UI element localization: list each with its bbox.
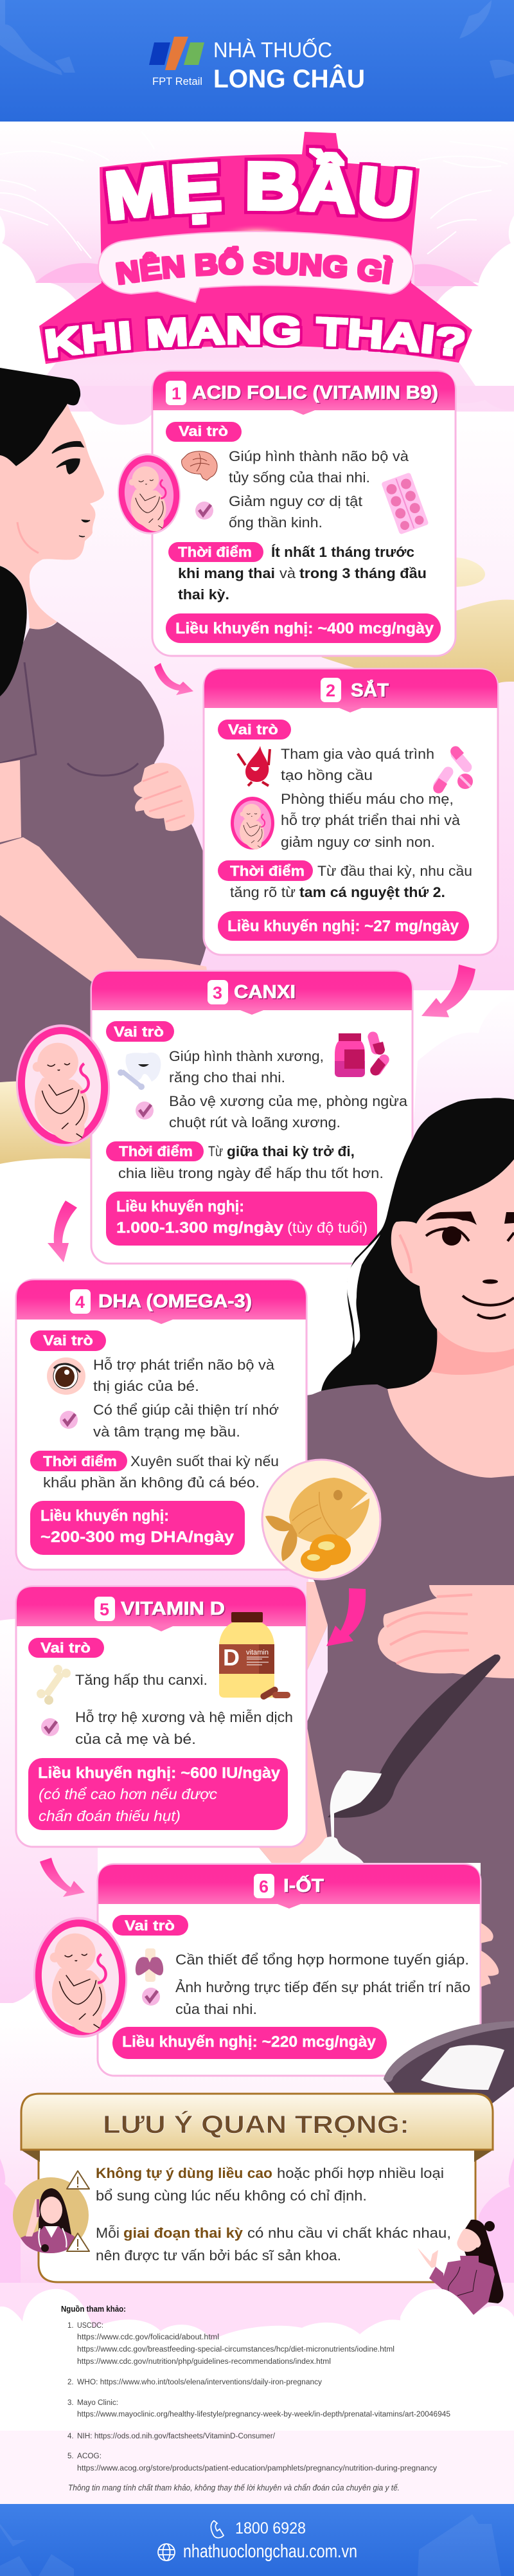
icon: blister pack: [381, 472, 429, 535]
icon: phone: [211, 2521, 224, 2538]
chest: [387, 1325, 514, 1478]
hand: [378, 1585, 514, 1678]
dose box: Liều khuyến nghị: ~600 IU/ngày: [38, 1764, 281, 1782]
number badge: 2: [326, 681, 335, 700]
card header: [17, 1587, 306, 1626]
header band: [0, 0, 514, 122]
card header: [153, 372, 455, 410]
face: [457, 2229, 481, 2252]
dose pill: Liều khuyến nghị: ~220 mcg/ngày: [122, 2033, 377, 2051]
icon: check: [41, 1718, 59, 1736]
role text 2: của thai nhi.: [175, 2001, 257, 2017]
hand: [134, 763, 194, 831]
face details: [52, 442, 90, 537]
face: [391, 1159, 514, 1352]
role text 1: tủy sống của thai nhi.: [229, 469, 370, 485]
note text: nên được tư vấn bởi bác sĩ sản khoa.: [96, 2247, 341, 2263]
card header: [204, 669, 497, 708]
arrow 4: [326, 1588, 366, 1646]
role pill: [30, 1330, 106, 1351]
website: nhathuoclongchau.com.vn: [183, 2541, 357, 2562]
number badge: [166, 381, 186, 405]
arm skin: [259, 1582, 350, 1863]
timing pill: [30, 1451, 127, 1471]
dose pill: Liều khuyến nghị: ~400 mcg/ngày: [175, 620, 434, 637]
icon: vitamin D bottle: D: [223, 1644, 240, 1671]
yogurt mound: [300, 1837, 364, 1863]
number badge: 1: [172, 384, 181, 403]
hair: [0, 368, 80, 696]
hair highlight: [347, 1235, 380, 1348]
reference list: WHO: https://www.who.int/tools/elena/interventions/daily-iron-pregnancy: [77, 2379, 322, 2386]
timing text: khẩu phần ăn không đủ cá béo.: [43, 1474, 260, 1491]
number badge: [94, 1597, 115, 1621]
dose box: chẩn đoán thiếu hụt): [39, 1808, 181, 1824]
card frame: [98, 1864, 481, 2076]
role text 2: chuột rút và loãng xương.: [169, 1114, 341, 1130]
illustration: woman right: [259, 1098, 514, 2032]
role pill: [106, 1021, 174, 1042]
dose pill: [112, 2027, 387, 2059]
role pill: Vai trò: [40, 1640, 91, 1656]
title: [39, 132, 472, 364]
role text 1: tạo hồng cầu: [281, 767, 373, 783]
role text 1: Hỗ trợ phát triển não bộ và: [93, 1357, 275, 1373]
face details: [400, 1211, 514, 1318]
icon: thyroid: [136, 1948, 163, 1982]
icon: check: [195, 502, 213, 520]
title backing shape: [39, 132, 472, 364]
references: [61, 2304, 450, 2492]
dose pill: [218, 911, 469, 941]
role text 2: Giảm nguy cơ dị tật: [229, 493, 362, 509]
role text 1: [169, 1048, 324, 1085]
arrow 1: [154, 663, 193, 695]
timing pill: [168, 542, 263, 562]
role text 2: Ảnh hưởng trực tiếp đến sự phát triển trí não: [175, 1979, 470, 1995]
speech bubble: [98, 231, 413, 302]
reference list: https://www.cdc.gov/folicacid/about.html: [77, 2334, 219, 2341]
card header: [98, 1865, 480, 1904]
icon: globe: [158, 2544, 175, 2561]
icon: vitamin D bottle: vitamin: [246, 1649, 269, 1656]
title line 3: KHI MANG THAI?: [42, 313, 468, 361]
timing text: [178, 544, 427, 603]
icon: tooth and bone: [118, 1053, 161, 1090]
dose box: (có thể cao hơn nếu được: [39, 1786, 218, 1802]
timing text: Ít nhất 1 tháng trước: [271, 544, 414, 560]
timing pill: Thời điểm: [43, 1453, 117, 1469]
card frame: [204, 669, 498, 955]
role text 2: của cả mẹ và bé.: [75, 1731, 196, 1747]
card frame: [16, 1280, 306, 1570]
panel: card 3: [91, 971, 412, 1264]
card header: [92, 972, 412, 1010]
icon: supplement bottle: [335, 1031, 391, 1077]
illustration: woman presenting: [418, 2220, 503, 2315]
panel: important note: [13, 2094, 503, 2315]
panel: card 4: [16, 1280, 306, 1570]
note text: Mỗi: [96, 2225, 120, 2241]
panel: card 2: [204, 669, 498, 955]
dose pill: Liều khuyến nghị: ~27 mg/ngày: [227, 918, 459, 935]
reference list: 2.: [67, 2379, 74, 2386]
timing text: Từ: [208, 1143, 223, 1159]
reference list: https://www.mayoclinic.org/healthy-lifestyle/pregnancy-week-by-week/in-depth/prenatal-vitamins/art-20046945: [77, 2411, 450, 2418]
sweater: [442, 2256, 495, 2315]
reference list: Mayo Clinic:: [77, 2399, 118, 2407]
timing text: và: [279, 565, 296, 581]
role pill: Vai trò: [228, 721, 278, 738]
role pill: [218, 720, 291, 739]
icon: doctor: [13, 2177, 89, 2253]
dose box: [106, 1192, 377, 1246]
card frame: [16, 1586, 306, 1847]
dose box: [30, 1501, 245, 1555]
reference list: NIH: https://ods.od.nih.gov/factsheets/VitaminD-Consumer/: [77, 2433, 276, 2440]
number badge: 6: [259, 1877, 269, 1896]
timing pill: [218, 860, 313, 881]
timing text: thai kỳ.: [178, 586, 229, 603]
role pill: [112, 1915, 188, 1936]
fingertips: [481, 1923, 499, 1987]
note text: hoặc phối hợp nhiều loại: [277, 2165, 444, 2181]
footer band: [0, 2504, 514, 2576]
panel: card 5: [16, 1586, 306, 1847]
timing text: Từ đầu thai kỳ, nhu cầu: [317, 863, 472, 879]
icon: check: [136, 1102, 154, 1120]
brand name line 2: LONG CHÂU: [213, 64, 365, 93]
note text: [96, 2165, 451, 2263]
reference list: 4.: [67, 2433, 74, 2440]
shirt folds: [0, 662, 36, 763]
reference list: 3.: [67, 2399, 74, 2407]
role text 2: [93, 1402, 279, 1440]
role pill: Vai trò: [43, 1332, 93, 1348]
heading: CANXI: [234, 982, 296, 1002]
reference list: [67, 2322, 450, 2472]
role text 2: và tâm trạng mẹ bầu.: [93, 1424, 240, 1440]
neck shade: [430, 1329, 514, 1375]
title line 1: MẸ BẦU: [103, 145, 416, 228]
heading: SẮT: [351, 679, 389, 701]
role text 1: Tăng hấp thu canxi.: [75, 1672, 208, 1688]
reference list: https://www.cdc.gov/nutrition/php/guidelines-recommendations/index.html: [77, 2358, 331, 2366]
note text: Không tự ý dùng liều cao: [96, 2165, 272, 2181]
heading: VITAMIN D: [121, 1599, 225, 1619]
dose box: Liều khuyến nghị:: [40, 1507, 169, 1525]
icon: vitamin D bottle: [219, 1612, 290, 1701]
logo caption: FPT Retail: [152, 75, 202, 87]
decorative clouds behind title: [0, 132, 514, 386]
role text 2: [169, 1093, 408, 1130]
role text 2: [229, 493, 362, 531]
references heading: Nguồn tham khảo:: [61, 2304, 126, 2314]
timing pill: Thời điểm: [178, 544, 252, 560]
heading: I-ỐT: [283, 1874, 324, 1896]
role text 2: hỗ trợ phát triển thai nhi và: [281, 812, 461, 828]
timing text: giữa thai kỳ trở đi,: [227, 1143, 355, 1159]
hill: cream left: [0, 1081, 91, 1164]
note folds: [21, 2150, 493, 2162]
dose box: Liều khuyến nghị:: [116, 1198, 244, 1215]
sweater folds: [448, 2267, 477, 2296]
role text 2: Hỗ trợ hệ xương và hệ miễn dịch: [75, 1709, 293, 1725]
icon: bowl: [384, 2021, 514, 2104]
number badge: [208, 980, 228, 1004]
icon: warning 2: [67, 2233, 89, 2251]
arm: [0, 760, 208, 982]
timing text: [118, 1143, 384, 1181]
arrow 2: [421, 965, 475, 1017]
note body: [39, 2148, 475, 2282]
role pill: Vai trò: [125, 1918, 175, 1934]
reference list: https://www.acog.org/store/products/patient-education/pamphlets/pregnancy/nutrition-during-pregnancy: [77, 2465, 437, 2472]
disclaimer: Thông tin mang tính chất tham khảo, không thay thế lời khuyên và chẩn đoán của chuyên gia y tế.: [68, 2483, 400, 2492]
role text 2: giảm nguy cơ sinh non.: [281, 834, 435, 850]
reference list: 5.: [67, 2453, 74, 2460]
icon: check: [142, 1988, 160, 2006]
reference list: USCDC:: [77, 2322, 103, 2330]
icon: brain: [182, 451, 217, 480]
icon: warning 1: [67, 2171, 89, 2189]
icon: fetus card 3: [12, 1021, 114, 1150]
card header: [17, 1280, 306, 1320]
number badge: [254, 1874, 274, 1898]
role text 1: thị giác của bé.: [93, 1378, 199, 1394]
arrow 3: [48, 1201, 77, 1262]
number badge: 4: [75, 1293, 85, 1312]
number badge: 3: [213, 983, 222, 1002]
timing text: chia liều trong ngày để hấp thu tốt hơn.: [118, 1165, 384, 1181]
timing text: [43, 1453, 279, 1491]
reference list: ACOG:: [77, 2453, 102, 2460]
hair bun: [484, 2221, 495, 2231]
logo mark: [149, 37, 204, 70]
role text 1: [281, 746, 434, 783]
role text 2: ống thần kinh.: [229, 514, 323, 531]
note text: có nhu cầu vi chất khác nhau,: [247, 2225, 451, 2241]
icon: fetus card 6: [30, 1914, 131, 2041]
number badge: [70, 1289, 91, 1314]
icon: eye: [47, 1357, 85, 1395]
icon: check: [60, 1411, 78, 1429]
role pill: [166, 422, 242, 442]
timing pill: Thời điểm: [230, 863, 305, 879]
icon: fetus: [231, 797, 274, 849]
role text 2: [281, 791, 461, 850]
dose box: 1.000-1.300 mg/ngày: [116, 1219, 284, 1237]
arrow 5: [40, 1858, 85, 1897]
heading: DHA (OMEGA-3): [98, 1291, 252, 1312]
spoon: [328, 1655, 501, 1818]
illustration: pregnant woman left: [0, 368, 213, 1082]
role text 2: [175, 1979, 470, 2017]
timing text: tăng rõ từ: [230, 884, 296, 900]
panel: card 6: [98, 1864, 481, 2076]
hair: [321, 1098, 514, 1391]
role text 1: Giúp hình thành xương,: [169, 1048, 324, 1064]
note text: bổ sung cùng lúc nếu không có chỉ định.: [96, 2188, 367, 2204]
role text 1: răng cho thai nhi.: [169, 1069, 285, 1085]
heading: ACID FOLIC (VITAMIN B9): [192, 383, 438, 403]
dose box: (tùy độ tuổi): [287, 1219, 368, 1236]
brand name line 1: NHÀ THUỐC: [213, 37, 332, 62]
shirt: [259, 1384, 514, 2032]
cloud: right white: [411, 992, 514, 1157]
number badge: [321, 678, 341, 702]
timing text: tam cá nguyệt thứ 2.: [299, 884, 445, 900]
timing text: khi mang thai: [178, 565, 275, 581]
role text 2: [75, 1709, 293, 1747]
sleeve: [429, 2267, 445, 2291]
belly and shirt: [0, 622, 213, 1082]
role text 1: [93, 1357, 275, 1394]
dose pill: [166, 613, 441, 643]
role text 1: Cần thiết để tổng hợp hormone tuyến giáp.: [175, 1952, 469, 1968]
role text 2: Bảo vệ xương của mẹ, phòng ngừa: [169, 1093, 408, 1109]
title line 2: NÊN BỔ SUNG GÌ: [116, 246, 393, 286]
dose box: ~200-300 mg DHA/ngày: [40, 1528, 235, 1546]
dose box: [28, 1758, 288, 1830]
panel: card 1: [152, 371, 456, 656]
role pill: Vai trò: [179, 423, 228, 439]
number badge: 5: [100, 1600, 109, 1619]
role text 1: [229, 448, 409, 485]
card frame: [152, 371, 456, 656]
note title: LƯU Ý QUAN TRỌNG:: [103, 2110, 409, 2139]
long hair: [459, 2220, 503, 2303]
phone number: 1800 6928: [235, 2519, 306, 2537]
hill: cream behind card 1: [321, 558, 514, 684]
role text 1: Tham gia vào quá trình: [281, 746, 434, 762]
icon: bone: [37, 1665, 71, 1705]
timing text: trong 3 tháng đầu: [299, 565, 427, 581]
note header: [21, 2094, 493, 2150]
timing pill: [106, 1141, 204, 1161]
front cloud: [400, 2289, 514, 2331]
role text 2: Có thể giúp cải thiện trí nhớ: [93, 1402, 279, 1418]
timing pill: Thời điểm: [119, 1143, 193, 1159]
role text 2: Phòng thiếu máu cho mẹ,: [281, 791, 454, 807]
icon: pills: [431, 746, 474, 794]
reference list: 1.: [67, 2322, 74, 2330]
raised hand: [418, 2248, 438, 2268]
role pill: Vai trò: [114, 1024, 164, 1040]
timing text: Xuyên suốt thai kỳ nếu: [130, 1453, 279, 1469]
card frame: [91, 971, 412, 1264]
reference list: https://www.cdc.gov/breastfeeding-special-circumstances/hcp/diet-micronutrients/iodine.html: [77, 2346, 394, 2354]
icon: fetus card 1: [114, 451, 184, 537]
shoulder: [306, 1384, 391, 1408]
face: [0, 404, 104, 630]
role pill: [28, 1638, 104, 1658]
timing text: [230, 863, 472, 900]
logo: [149, 37, 365, 93]
title glow: [218, 224, 296, 242]
icon: fish and oil capsules: [262, 1460, 380, 1579]
yogurt: [330, 1770, 382, 1839]
note text: giai đoạn thai kỳ: [123, 2225, 244, 2241]
icon: blood drop: [238, 746, 270, 786]
role text 1: Giúp hình thành não bộ và: [229, 448, 409, 464]
